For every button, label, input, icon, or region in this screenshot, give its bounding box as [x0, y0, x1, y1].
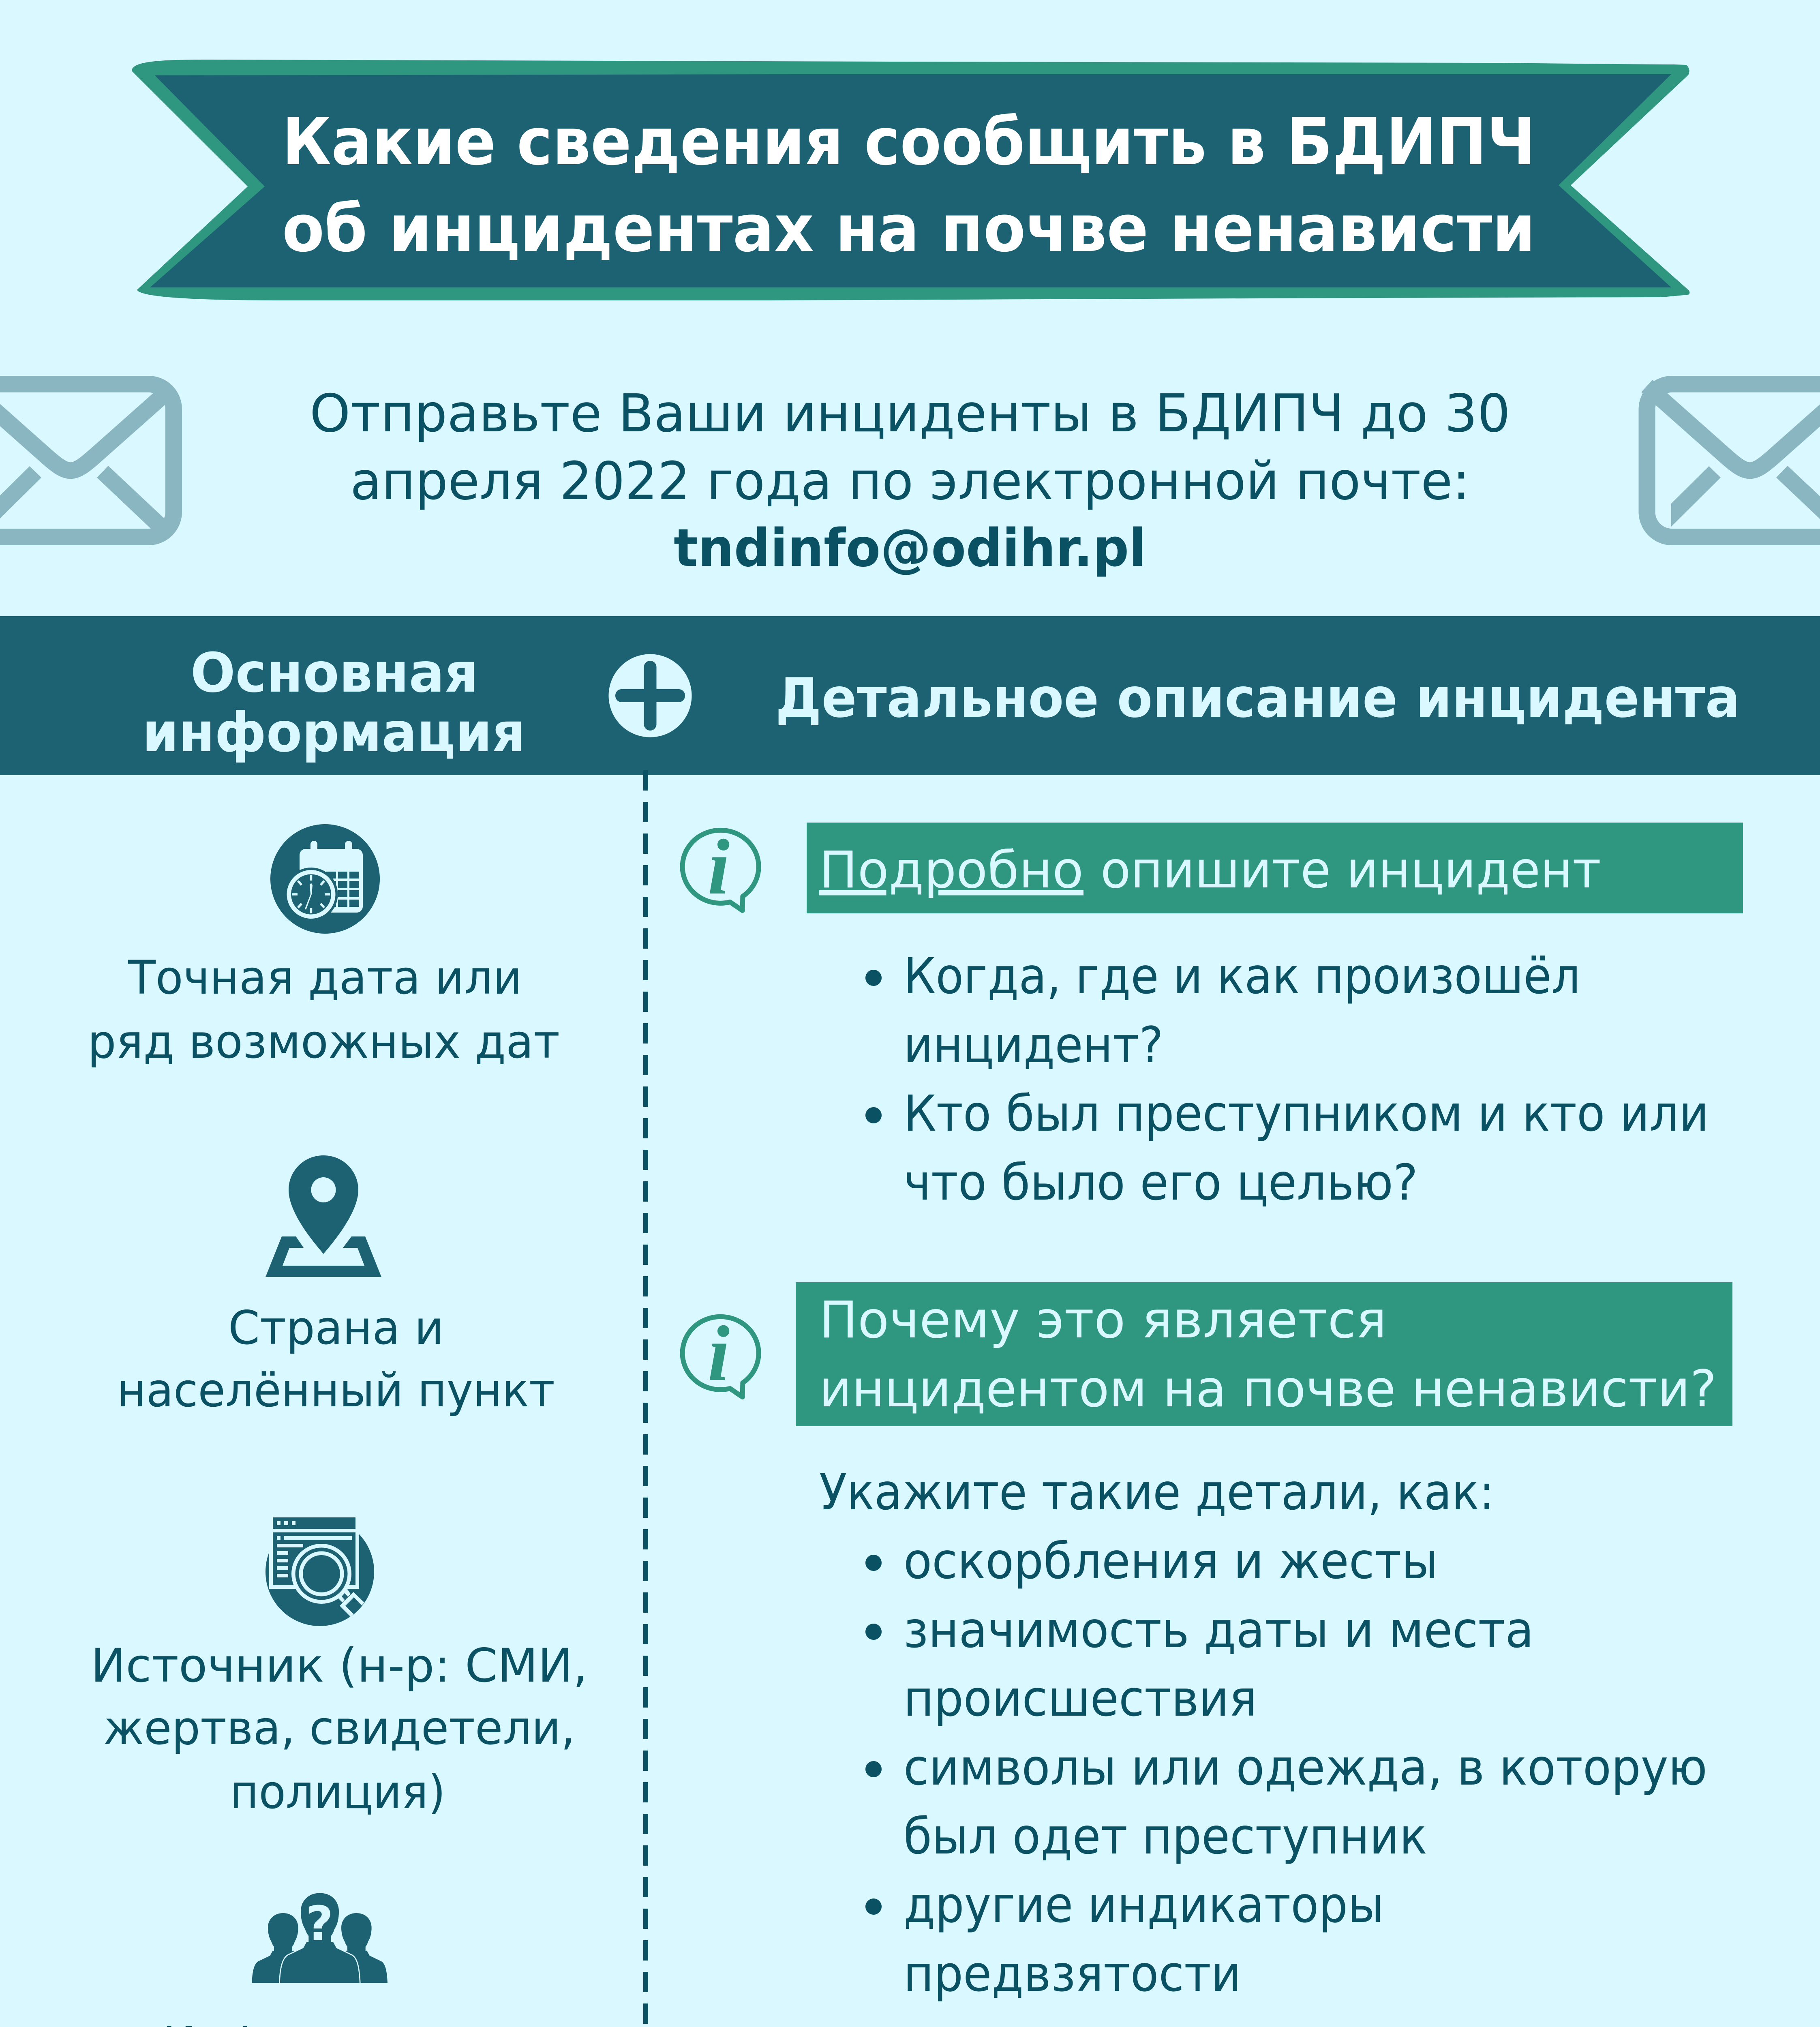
heading: basic information	[142, 641, 525, 764]
email address: tndinfo@odihr.pl	[674, 518, 1146, 579]
intro text block: Отправьте Ваши инциденты в БДИПЧ до 30	[310, 384, 1510, 444]
icon: info bubble 2: i	[708, 1310, 730, 1397]
heading: basic information: Основная	[191, 641, 478, 705]
icon: info bubble 1	[683, 823, 759, 911]
title text: об инцидентах на почве ненависти	[282, 191, 1535, 266]
list: incident questions: Когда, где и как произошёл	[904, 947, 1580, 1005]
icon: people with question mark: ?	[306, 1896, 333, 1952]
title text	[282, 104, 1535, 266]
box: why hate incident: Почему это является	[819, 1291, 1387, 1350]
icon: envelope right	[1647, 384, 1820, 537]
list: details: предвзятости	[904, 1945, 1241, 2003]
list: incident questions: что было его целью?	[904, 1154, 1418, 1211]
icon: info bubble 1: i	[708, 823, 730, 911]
list: details: значимость даты и места	[904, 1601, 1534, 1659]
label: country and locality: населённый пункт	[117, 1363, 555, 1417]
list: details	[819, 1463, 1707, 2003]
label: source: полиция)	[230, 1765, 445, 1819]
intro text block	[310, 384, 1510, 579]
header band	[0, 616, 1820, 775]
list: details: происшествия	[904, 1670, 1257, 1727]
icon: map pin	[266, 1155, 381, 1277]
list: incident questions	[865, 947, 1709, 1211]
dashed divider	[643, 770, 648, 2027]
label: date: Точная дата или	[128, 951, 522, 1005]
icon: source search window	[266, 1514, 374, 1626]
box: describe in detail	[807, 823, 1743, 913]
heading: basic information: информация	[142, 701, 525, 764]
icon: calendar and clock	[270, 824, 380, 934]
list: incident questions: Кто был преступником и кто или	[904, 1085, 1709, 1142]
list: details: был одет преступник	[904, 1808, 1427, 1865]
label: country and locality: Страна и	[228, 1301, 444, 1355]
label: date: ряд возможных дат	[88, 1015, 560, 1069]
label: source	[91, 1639, 588, 1819]
label: source: Источник (н-р: СМИ,	[91, 1639, 588, 1693]
heading: detailed description: Детальное описание инцидента	[775, 666, 1740, 730]
box: describe in detail: опишите инцидент	[1101, 841, 1601, 900]
list: details: оскорбления и жесты	[904, 1532, 1438, 1590]
icon: envelope left	[0, 384, 174, 537]
label: country and locality	[117, 1301, 555, 1417]
title text: Какие сведения сообщить в БДИПЧ	[282, 104, 1535, 180]
list: incident questions: инцидент?	[904, 1016, 1163, 1074]
intro text block: апреля 2022 года по электронной почте:	[350, 451, 1470, 512]
icon: people with question mark	[252, 1892, 388, 1984]
icon: info bubble 2	[683, 1310, 759, 1397]
box: why hate incident: инцидентом на почве ненависти?	[819, 1360, 1717, 1418]
icon: plus	[609, 654, 692, 737]
list: details: Укажите такие детали, как:	[819, 1463, 1495, 1521]
list: details: другие индикаторы	[904, 1876, 1384, 1934]
box: why hate incident	[796, 1282, 1732, 1426]
box: describe in detail: Подробно	[819, 841, 1083, 900]
list: details: символы или одежда, в которую	[904, 1739, 1707, 1796]
label: date	[88, 951, 560, 1069]
title banner	[132, 60, 1689, 300]
label: source: жертва, свидетели,	[103, 1701, 575, 1755]
